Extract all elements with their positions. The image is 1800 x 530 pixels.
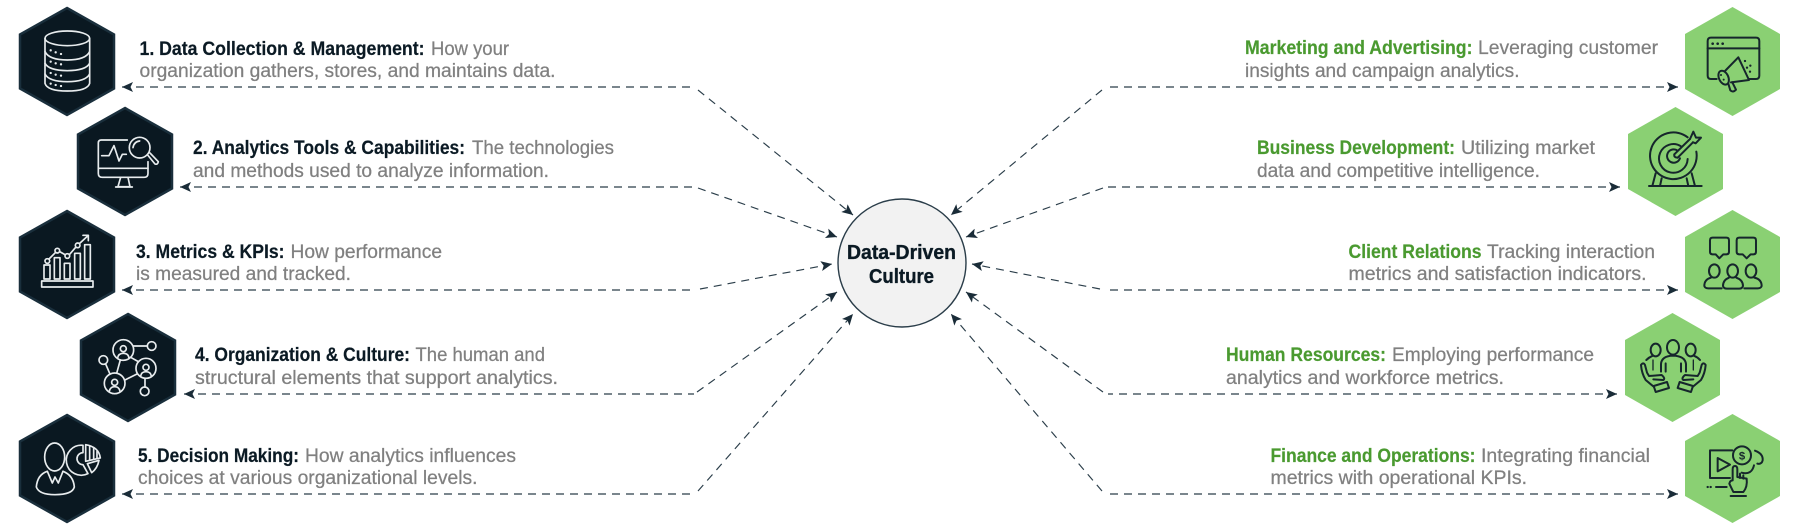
text: Marketing and Advertising: Leveraging customer xyxy=(1478,38,1659,59)
text: Business Development: Business Development: xyxy=(1257,138,1455,159)
item 8: Client Relations xyxy=(1348,210,1780,319)
icon: database xyxy=(20,8,114,115)
arrow: marketing to centre xyxy=(951,87,1678,215)
item 1: Data Collection xyxy=(20,8,556,115)
text: Data Collection: 1. Data Collection & Management: xyxy=(140,39,424,60)
item 4: Organization and Culture xyxy=(81,314,558,421)
text: Metrics and KPIs: 3. Metrics & KPIs: xyxy=(136,242,284,263)
item 5: Decision Making xyxy=(20,415,516,522)
arrow: data collection to centre xyxy=(122,87,853,215)
text: Data Collection: How your xyxy=(431,39,510,60)
icon: person with pie chart xyxy=(20,415,114,522)
text: Metrics and KPIs xyxy=(136,242,442,285)
text: Organization and Culture: 4. Organization & Culture: xyxy=(195,345,410,366)
icon: speech bubbles and people xyxy=(1685,210,1780,319)
arrow: analytics tools to centre xyxy=(180,187,837,237)
text: Marketing and Advertising xyxy=(1245,38,1659,82)
icon: target with arrow xyxy=(1628,107,1723,216)
icon: people network xyxy=(81,314,175,421)
text: Metrics and KPIs: How performance xyxy=(290,242,442,263)
text: Analytics Tools: and methods used to analyze information. xyxy=(193,161,549,182)
text: Decision Making xyxy=(138,446,516,489)
text: Finance and Operations: Finance and Operations: xyxy=(1270,446,1476,467)
central node: Data-Driven Culture: Culture xyxy=(869,266,934,288)
text: Human Resources: analytics and workforce metrics. xyxy=(1226,368,1504,389)
text: Business Development: Utilizing market xyxy=(1461,138,1596,159)
text: Marketing and Advertising: insights and campaign analytics. xyxy=(1245,61,1520,82)
text: Client Relations: metrics and satisfaction indicators. xyxy=(1348,264,1646,285)
text: Client Relations: Tracking interaction xyxy=(1487,242,1655,263)
text: Data Collection: organization gathers, stores, and maintains data. xyxy=(140,61,556,82)
text: Human Resources: Human Resources: xyxy=(1226,345,1386,366)
icon: video, dollar and hand xyxy=(1685,414,1780,523)
text: Business Development: data and competitive intelligence. xyxy=(1257,161,1540,182)
text: Data Collection xyxy=(140,39,556,82)
text: Marketing and Advertising: Marketing and Advertising: xyxy=(1245,38,1472,59)
text: Organization and Culture: The human and xyxy=(416,345,545,366)
text: Client Relations: Client Relations xyxy=(1348,242,1482,263)
central node: Data-Driven Culture xyxy=(838,199,966,327)
item 3: Metrics and KPIs xyxy=(20,211,442,318)
text: Decision Making: choices at various organizational levels. xyxy=(138,468,478,489)
arrow: business development to centre xyxy=(966,187,1620,237)
arrow: organization to centre xyxy=(184,292,837,394)
arrow: finance to centre xyxy=(951,314,1678,494)
arrow: client relations to centre xyxy=(972,264,1678,290)
icon: bar chart with trend xyxy=(20,211,114,318)
central node: Data-Driven Culture: Data-Driven xyxy=(847,242,956,264)
item 6: Marketing and Advertising xyxy=(1245,7,1780,116)
text: Finance and Operations: Integrating financial xyxy=(1481,446,1650,467)
item 10: Finance and Operations xyxy=(1270,414,1780,523)
item 9: Human Resources xyxy=(1226,313,1720,422)
text: Metrics and KPIs: is measured and tracked. xyxy=(136,264,351,285)
text: Decision Making: 5. Decision Making: xyxy=(138,446,299,467)
arrow: metrics to centre xyxy=(122,264,832,290)
item 2: Analytics Tools xyxy=(78,108,614,215)
text: Decision Making: How analytics influences xyxy=(305,446,516,467)
icon: monitor and magnifier xyxy=(78,108,172,215)
text: Human Resources: Employing performance xyxy=(1392,345,1594,366)
text: Analytics Tools: The technologies xyxy=(472,138,614,159)
item 7: Business Development xyxy=(1257,107,1723,216)
text: Organization and Culture xyxy=(195,345,558,389)
icon: browser with megaphone xyxy=(1685,7,1780,116)
arrow: decision making to centre xyxy=(122,314,853,494)
text: Finance and Operations: metrics with operational KPIs. xyxy=(1270,468,1527,489)
text: Human Resources xyxy=(1226,345,1594,389)
icon: hands holding team xyxy=(1625,313,1720,422)
text: Client Relations xyxy=(1348,242,1655,285)
text: Analytics Tools xyxy=(193,138,614,182)
text: Business Development xyxy=(1257,138,1596,182)
text: Analytics Tools: 2. Analytics Tools & Capabilities: xyxy=(193,138,465,159)
text: Organization and Culture: structural elements that support analytics. xyxy=(195,368,558,389)
text: Finance and Operations xyxy=(1270,446,1650,489)
icon: video, dollar and hand: $ xyxy=(1739,450,1746,462)
arrow: human resources to centre xyxy=(966,292,1617,394)
